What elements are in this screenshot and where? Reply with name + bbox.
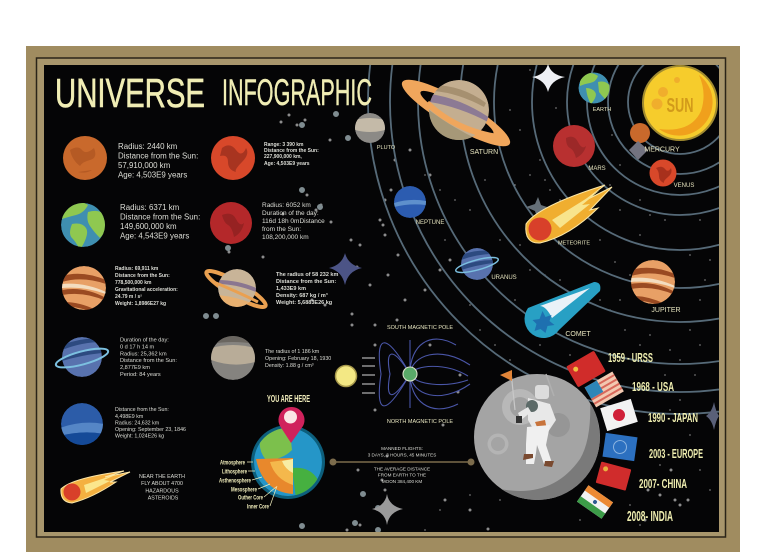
text: uranus facts: Radius: 25,362 km: [120, 352, 167, 358]
labels: earth layers: Inner Core: [247, 504, 269, 510]
planet: jupiter right: [631, 260, 675, 306]
star: white: [532, 64, 565, 92]
text: uranus facts: Duration of the day:: [120, 338, 169, 344]
timeline labels: 1968 - USA: [632, 379, 674, 394]
text: jupiter facts: Radius: 69,911 km: [115, 266, 159, 272]
label: meteorite: METEORITE: [558, 240, 590, 246]
star: grey: [372, 494, 403, 525]
text: neptune facts: Radius: 24,632 km: [115, 420, 160, 426]
text: asteroid note: ASTEROIDS: [148, 496, 179, 502]
text: mercury facts: Radius: 2440 km: [118, 142, 178, 151]
planet: saturn center column: [204, 269, 268, 309]
text: uranus facts: 2,877E9 km: [120, 365, 150, 371]
label: comet: COMET: [565, 331, 591, 338]
star: grey diamond near mercury: [629, 141, 648, 160]
text: venus facts: Radius: 6052 km: [262, 202, 311, 209]
text: pluto facts: The radius of 1 186 km: [265, 349, 320, 355]
timeline labels: 2007- CHINA: [639, 476, 687, 491]
star: slate right: [706, 402, 719, 430]
text: venus facts: 108,200,000 km: [262, 234, 309, 241]
planet: neptune: [394, 186, 426, 218]
timeline labels: 1959 - URSS: [608, 350, 653, 365]
text: jupiter facts: Weight: 1,8986E27 kg: [115, 301, 166, 307]
text: pluto facts: Opening: February 18, 1930: [265, 356, 331, 362]
text: earth facts: Age: 4,543E9 years: [120, 232, 189, 240]
title: INFOGRAPHIC: [222, 72, 372, 113]
labels: earth layers: Outher Core: [238, 494, 263, 502]
text: earth facts: Radius: 6371 km: [120, 203, 180, 212]
distance line: [330, 458, 474, 466]
orbits: [367, 65, 719, 415]
label: jupiter: JUPITER: [651, 307, 681, 314]
astronaut: [516, 374, 556, 467]
planet: uranus: [454, 248, 500, 280]
flag on moon: [500, 370, 515, 410]
star field: [206, 70, 710, 530]
star: purple: [329, 253, 362, 285]
text: venus facts: 116d 18h 0mDistance: [262, 218, 325, 225]
label: earth: EARTH: [593, 107, 611, 113]
text: asteroid note: NEAR THE EARTH: [139, 474, 185, 480]
text: uranus facts: Distance from the Sun:: [120, 358, 177, 364]
label: saturn: SATURN: [470, 149, 498, 156]
planet: neptune left: [61, 403, 103, 445]
timeline labels: 2008- INDIA: [627, 508, 673, 525]
sun: [643, 66, 717, 140]
text: mercury facts: Age: 4,503E9 years: [118, 170, 187, 180]
planet: pluto center column: [211, 334, 255, 380]
planet: venus center column: [210, 202, 252, 244]
planet: mars center column: [211, 136, 255, 180]
text: saturn facts: 1,433E9 km: [276, 286, 306, 292]
planet: earth right: [578, 72, 611, 104]
text: jupiter facts: 778,500,000 km: [115, 280, 152, 286]
label: mercury: MERCURY: [644, 146, 680, 154]
text: asteroid note: FLY ABOUT 4700: [141, 481, 183, 487]
moon: [474, 374, 600, 501]
timeline labels: 2003 - EUROPE: [649, 446, 703, 461]
labels: earth layers: Asthenosphere: [219, 478, 251, 484]
planet: mercury left: [63, 136, 107, 180]
icon: location pin: [278, 407, 304, 443]
flag: japan: [600, 399, 638, 431]
labels: earth layers: Atmosphere: [220, 460, 245, 466]
text: mars facts: Distance from the Sun:: [264, 148, 319, 154]
text: mars facts: Age: 4,503E9 years: [264, 161, 310, 167]
text: neptune facts: 4,498E9 km: [115, 414, 144, 420]
planet: venus right: [650, 160, 676, 186]
text: mars facts: 227,900,000 km,: [264, 154, 302, 160]
timeline labels: 1990 - JAPAN: [648, 410, 698, 425]
label: neptune: NEPTUNE: [416, 220, 444, 226]
text: neptune facts: Weight: 1,024E26 kg: [115, 434, 164, 440]
star: near meteorite: [526, 197, 547, 220]
flag: usa: [585, 371, 624, 407]
text: pluto facts: Density: 1.88 g / cm³: [265, 363, 314, 369]
flag: india: [577, 485, 613, 519]
icon: meteor left: [61, 471, 130, 503]
planet: pluto: [355, 113, 385, 143]
text: saturn facts: Weight: 5,6883E26 kg: [276, 300, 332, 306]
label: south magnetic pole: SOUTH MAGNETIC POLE: [387, 325, 453, 331]
title: [55, 70, 372, 116]
earth cross-section with pin: [251, 425, 325, 499]
planet: earth left: [61, 203, 105, 247]
text: venus facts: from the Sun:: [262, 226, 301, 233]
heading: you are here: YOU ARE HERE: [267, 393, 310, 405]
text: manned flights: MOON 384,400 KM: [382, 479, 422, 484]
title: UNIVERSE: [55, 70, 205, 116]
timeline labels: [608, 350, 703, 525]
label: mars: MARS: [588, 166, 606, 172]
icon: small sun: [336, 366, 356, 386]
text: mercury facts: 57,910,000 km: [118, 161, 171, 170]
meteorite: [526, 185, 612, 243]
text: jupiter facts: 24.79 m / s²: [115, 294, 142, 300]
comet: [524, 282, 600, 338]
text: venus facts: Duration of the day:: [262, 210, 319, 217]
text: earth facts: Distance from the Sun:: [120, 212, 200, 222]
label: venus: VENUS: [674, 183, 694, 189]
text: saturn facts: Distance from the Sun:: [276, 279, 336, 285]
flag: china: [596, 461, 631, 491]
text: earth facts: 149,600,000 km: [120, 222, 177, 231]
text: manned flights: MANNED FLIGHTS:: [381, 446, 423, 451]
planet: jupiter left: [62, 266, 106, 312]
text: neptune facts: Opening: September 23, 1846: [115, 427, 186, 433]
planet: saturn: [402, 80, 510, 146]
flag: european union: [602, 433, 638, 461]
labels: earth layers: Mesosphere: [231, 486, 257, 494]
text: jupiter facts: Distance from the Sun:: [115, 273, 170, 279]
text: uranus facts: Period: 84 years: [120, 372, 161, 378]
label: pluto: PLUTO: [377, 145, 396, 151]
label: uranus: URANUS: [491, 275, 517, 281]
text: asteroid note: HAZARDOUS: [145, 488, 179, 494]
text: mercury facts: Distance from the Sun:: [118, 152, 198, 160]
planet: mercury right: [630, 123, 650, 143]
text: manned flights: THE AVERAGE DISTANCE: [374, 466, 430, 472]
text: uranus facts: 0 d 17 h 14 m: [120, 344, 155, 350]
labels: earth layers: [219, 460, 277, 510]
sun: SUN: [666, 95, 694, 117]
text: manned flights: 3 DAYS, 3 HOURS, 45 MINUTES: [368, 452, 436, 458]
flag: ussr: [566, 351, 606, 387]
text: neptune facts: Distance from the Sun:: [115, 407, 169, 413]
text: saturn facts: Density: 687 kg / m³: [276, 292, 328, 299]
text: mars facts: Range: 3 390 km: [264, 142, 304, 148]
text: manned flights: FROM EARTH TO THE: [378, 472, 426, 478]
labels: earth layers: Lithosphere: [222, 468, 247, 476]
planet: mars right: [553, 125, 595, 167]
magnetic field diagram: [379, 339, 470, 409]
text: saturn facts: The radius of 58 232 km: [276, 272, 338, 278]
planet: uranus left: [54, 337, 110, 377]
arrows: solar wind: [362, 358, 375, 393]
text: jupiter facts: Gravitational acceleration:: [115, 287, 178, 293]
label: north magnetic pole: NORTH MAGNETIC POLE: [387, 419, 453, 425]
